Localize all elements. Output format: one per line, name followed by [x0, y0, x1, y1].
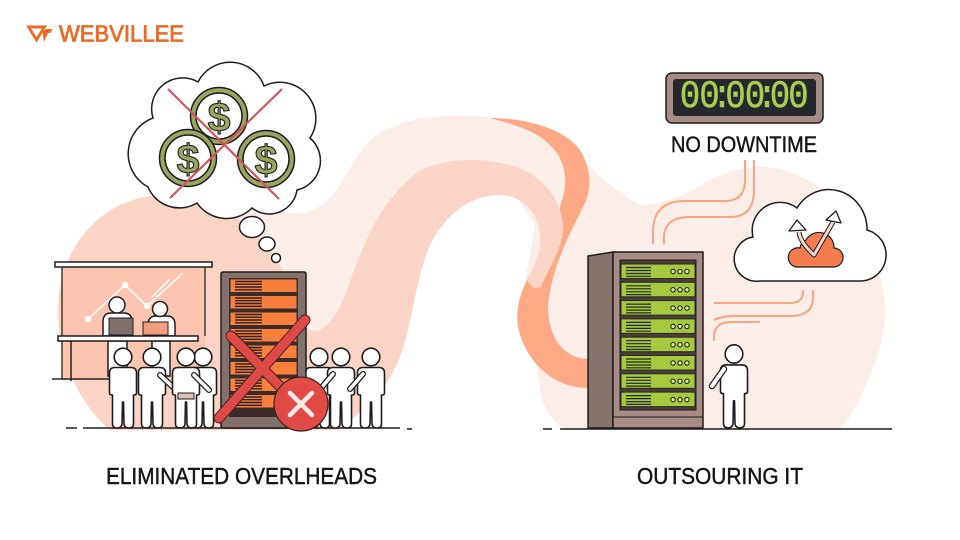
logo icon — [26, 26, 52, 42]
label: eliminated overheads: ELIMINATED OVERLHEADS — [106, 463, 377, 489]
cabinet front — [613, 252, 703, 428]
server rack: outsourced — [588, 252, 703, 428]
desk — [58, 336, 198, 341]
ground line right — [543, 428, 892, 430]
red cross over coins — [168, 89, 282, 199]
chart lines — [86, 273, 183, 322]
crossed out server rack — [219, 272, 328, 431]
group of three people — [306, 348, 384, 428]
background: pink blob and ribbon — [58, 160, 563, 430]
seated person right — [143, 302, 175, 336]
timer digits: 00:00:00 — [680, 75, 809, 119]
up arrows — [789, 211, 841, 255]
coin top — [190, 88, 248, 144]
coin left: $ — [177, 136, 200, 182]
board side lines — [62, 267, 205, 379]
red X — [219, 320, 305, 418]
cloud with arrows — [734, 190, 886, 281]
cloud outline — [734, 190, 886, 281]
small orange cloud — [788, 232, 843, 267]
label: outsourcing it: OUTSOURING IT — [637, 463, 803, 489]
presentation board — [62, 267, 205, 380]
background: light wave — [190, 116, 885, 430]
meeting room scene — [52, 262, 216, 428]
floor line and legs — [52, 341, 110, 381]
connector lines: cloud to person — [714, 290, 813, 341]
label: no downtime: NO DOWNTIME — [671, 132, 817, 157]
rack cabinet — [221, 272, 306, 428]
logo wordmark: WEBVILLEE — [59, 20, 184, 46]
coin top: $ — [208, 94, 231, 140]
seated person left — [103, 297, 133, 336]
connector lines: timer to server — [653, 160, 754, 244]
thought bubbles — [240, 216, 280, 262]
green server units — [621, 264, 695, 278]
cloud outline — [128, 62, 320, 218]
board top rail — [55, 262, 212, 267]
coin left — [160, 130, 216, 186]
red circle badge — [274, 377, 328, 431]
thought cloud with crossed coins — [128, 62, 320, 262]
coin right: $ — [255, 137, 278, 183]
background: orange ribbon — [490, 118, 589, 388]
timer display — [666, 73, 823, 123]
lower bodies — [108, 341, 170, 376]
person beside server — [712, 345, 748, 428]
group of four people — [110, 348, 216, 428]
orange server units — [230, 279, 297, 292]
ground line left — [66, 428, 412, 429]
coin right — [238, 130, 294, 188]
cabinet side — [588, 252, 613, 428]
logo — [26, 20, 184, 46]
